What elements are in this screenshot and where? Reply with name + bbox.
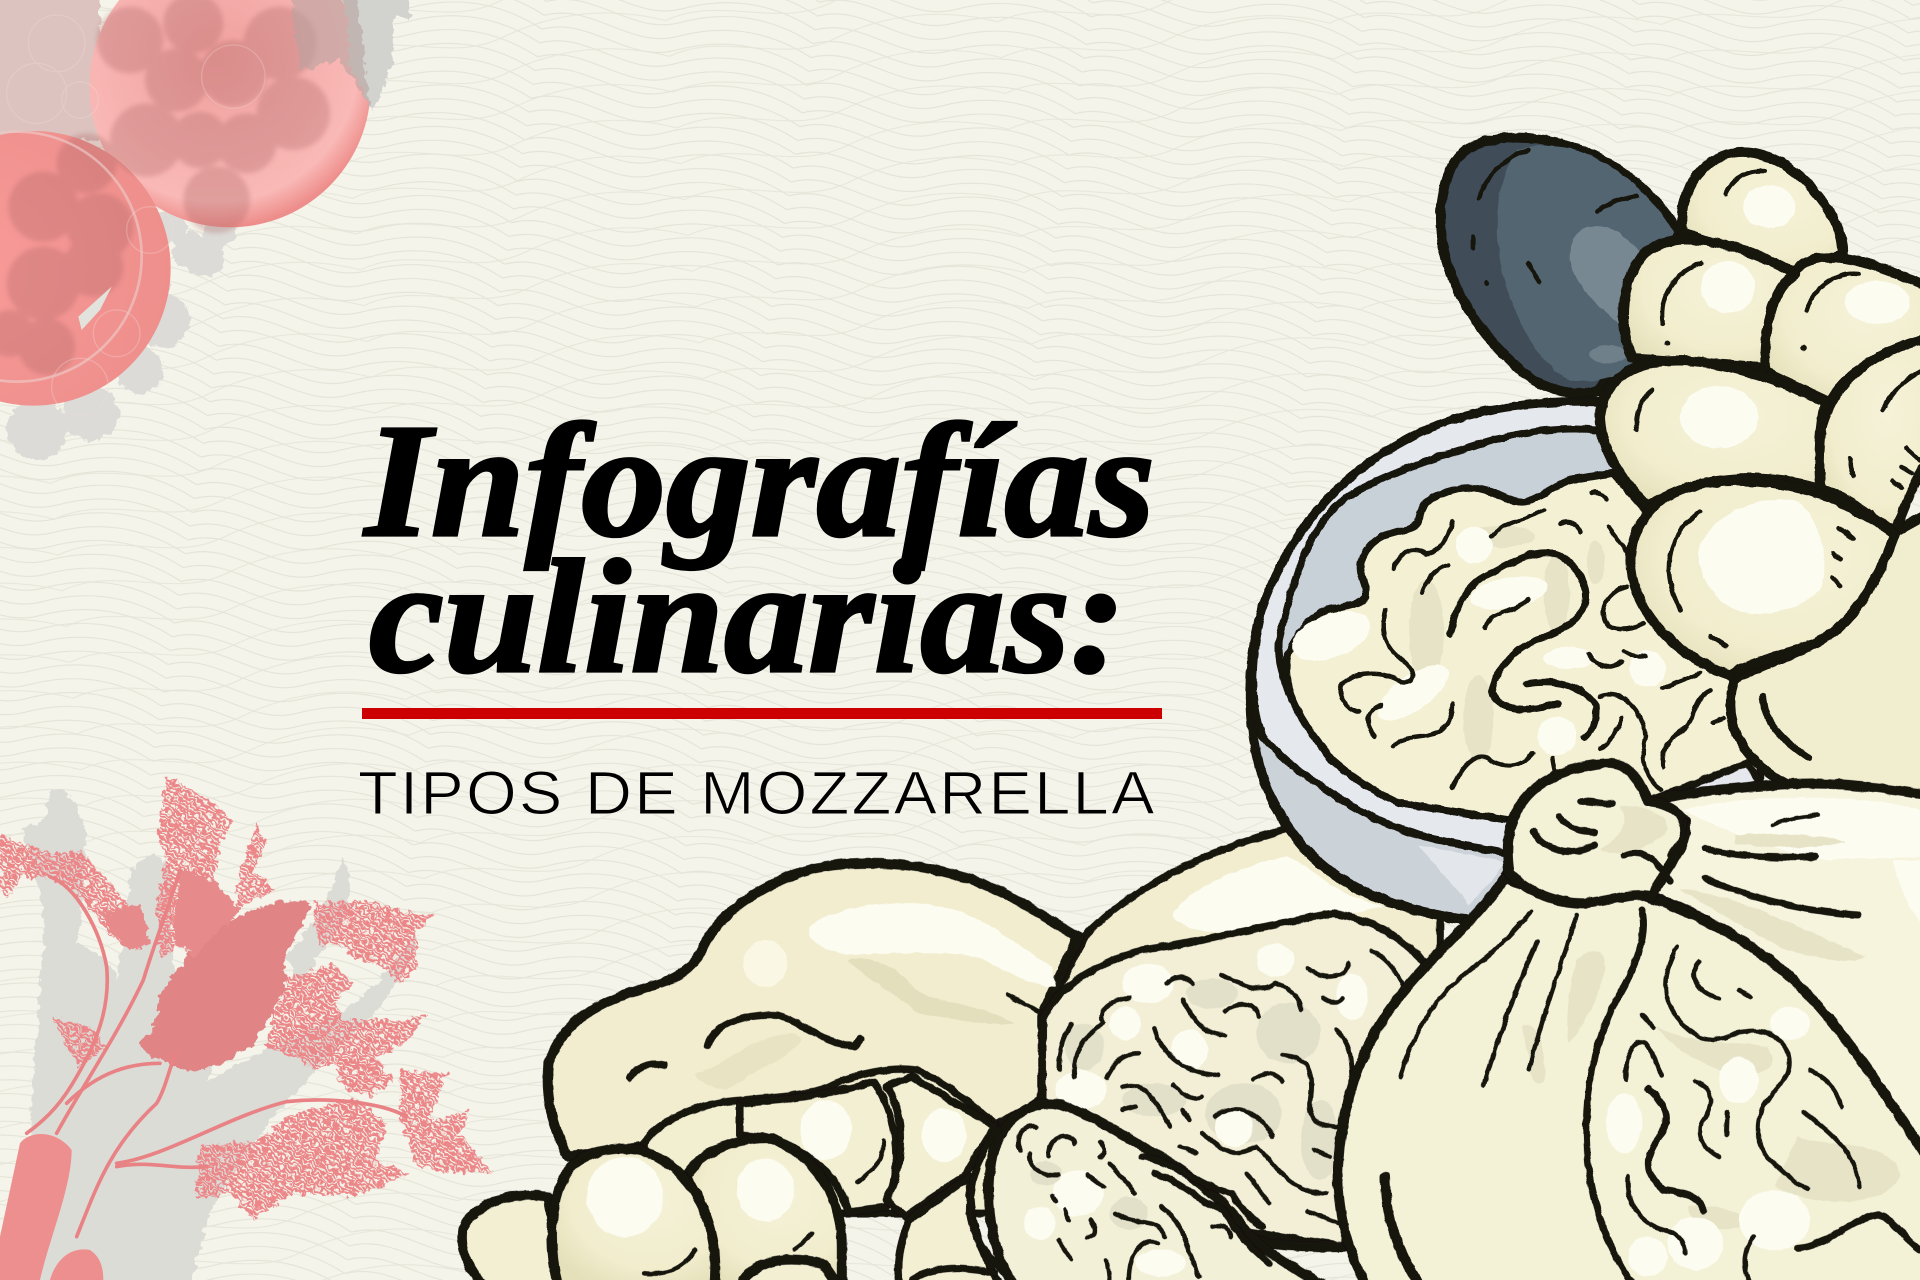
inner ridge under the lump [644, 1069, 995, 1213]
red circle, upper [89, 0, 371, 227]
shredded cheese, front [969, 1104, 1327, 1280]
ball A [552, 1149, 715, 1280]
grape outlines [7, 15, 265, 415]
ball B [686, 1138, 842, 1280]
title [363, 392, 1155, 707]
left lump and small balls, lower centre [462, 863, 1425, 1280]
bowl interior [1279, 429, 1750, 820]
decoration: grapes with red circles [0, 0, 410, 460]
lower piece [898, 1177, 1001, 1280]
big right lump [1730, 510, 1920, 814]
textured stretched cheese [1043, 913, 1425, 1247]
bowl rim fragment right of knot [1648, 763, 1761, 802]
vine leaf [287, 0, 410, 110]
mozzarella balls and knot, upper right [1600, 152, 1920, 814]
ball, back [740, 1082, 896, 1212]
subtitle: TIPOS DE MOZZARELLA [358, 760, 1157, 828]
dense leaf centre [100, 870, 310, 1070]
curd details and squiggles [1285, 492, 1724, 790]
illustration: mozzarella types [462, 138, 1920, 1280]
ball, right of back [886, 1077, 995, 1217]
grey carrot leaves [23, 790, 417, 1280]
title line 1: Infografías [363, 392, 1155, 571]
burrata body [1338, 878, 1920, 1280]
burrata knot [1508, 763, 1686, 903]
burrata bag [1338, 763, 1920, 1280]
red leaf stems [27, 870, 407, 1237]
curd in the bowl [1286, 473, 1760, 820]
red carrots [0, 1134, 103, 1280]
ball, large front [1630, 481, 1895, 675]
spoon [1441, 138, 1678, 393]
back cheese lump [1043, 828, 1440, 1113]
ball, right middle [1764, 257, 1920, 402]
bowl [1250, 402, 1760, 920]
burrata flap [1648, 783, 1920, 1280]
ball, top [1682, 152, 1843, 272]
decoration: carrots with red leaves [0, 777, 493, 1280]
ball, left middle [1624, 240, 1795, 367]
ball, centre [1600, 360, 1825, 506]
lacy red fronds [0, 777, 493, 1220]
bowl rim [1253, 402, 1750, 853]
left cheese lump [548, 863, 1078, 1157]
grape bunch shading [0, 0, 330, 375]
red divider rule [362, 708, 1162, 719]
small knuckle far left [462, 1195, 561, 1280]
fold on right edge [1817, 337, 1920, 532]
red circle, lower [0, 131, 171, 406]
title line 2: culinarias: [369, 528, 1126, 707]
bowl body [1250, 402, 1750, 920]
